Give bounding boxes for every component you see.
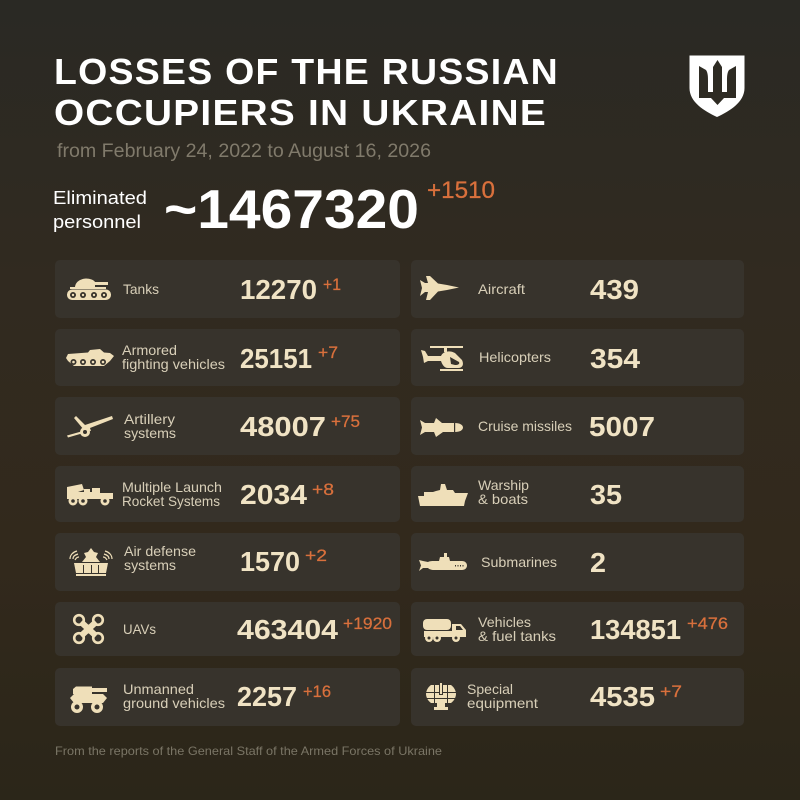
panel: cruise missiles bbox=[411, 397, 744, 455]
emblem: trident shield bbox=[690, 56, 744, 117]
icon: helicopter bbox=[421, 346, 463, 371]
value: aircraft: 439 bbox=[590, 274, 639, 305]
icon: submarine bbox=[419, 553, 467, 571]
delta: multiple launch rocket systems: +8 bbox=[312, 480, 334, 499]
label: cruise missiles: Cruise missiles bbox=[478, 418, 572, 434]
label: unmanned ground vehicles: Unmanned bbox=[123, 681, 194, 697]
label: submarines: Submarines bbox=[481, 554, 557, 570]
title: LOSSES OF THE RUSSIAN bbox=[54, 51, 559, 92]
delta: special equipment: +7 bbox=[660, 682, 682, 701]
value: armored fighting vehicles: 25151 bbox=[240, 343, 312, 374]
delta: air defense systems: +2 bbox=[305, 546, 327, 565]
panel: special equipment bbox=[411, 668, 744, 726]
value: artillery systems: 48007 bbox=[240, 411, 326, 442]
icon: warship bbox=[418, 484, 468, 506]
icon: armored vehicle bbox=[66, 349, 114, 366]
label: special equipment: Special bbox=[467, 681, 513, 697]
date range subtitle: from February 24, 2022 to August 16, 2026 bbox=[57, 141, 431, 162]
icon: rocket launcher bbox=[67, 484, 113, 506]
delta: artillery systems: +75 bbox=[331, 412, 360, 431]
icon: tank bbox=[67, 278, 111, 300]
label: multiple launch rocket systems: Multiple Launch bbox=[122, 479, 222, 495]
panel: multiple launch rocket systems bbox=[55, 466, 400, 522]
value: cruise missiles: 5007 bbox=[589, 411, 655, 442]
value: tanks: 12270 bbox=[240, 274, 317, 305]
icon: unmanned ground vehicle bbox=[70, 686, 107, 713]
source note: From the reports of the General Staff of the Armed Forces of Ukraine bbox=[55, 744, 442, 758]
value: air defense systems: 1570 bbox=[240, 546, 300, 577]
label: multiple launch rocket systems: Rocket Systems bbox=[122, 493, 220, 509]
label: warship and boats: & boats bbox=[478, 491, 528, 507]
label: air defense systems bbox=[124, 543, 196, 573]
icon: air defense bbox=[70, 548, 112, 576]
personnel label: personnel bbox=[53, 212, 141, 232]
icon: special equipment bbox=[426, 683, 456, 710]
label: multiple launch rocket systems bbox=[122, 479, 222, 509]
panel: helicopters bbox=[411, 329, 744, 386]
personnel daily change: +1510 bbox=[427, 177, 495, 204]
panel: tanks bbox=[55, 260, 400, 318]
label: artillery systems bbox=[124, 411, 176, 441]
label: air defense systems: systems bbox=[124, 557, 176, 573]
panel: vehicles and fuel tanks bbox=[411, 602, 744, 656]
label: helicopters: Helicopters bbox=[479, 349, 551, 365]
label: vehicles and fuel tanks: Vehicles bbox=[478, 614, 531, 630]
panel: armored fighting vehicles bbox=[55, 329, 400, 386]
icon: fuel truck bbox=[423, 619, 466, 642]
label: aircraft: Aircraft bbox=[478, 281, 525, 297]
panel: warship and boats bbox=[411, 466, 744, 522]
icon: cruise missile bbox=[420, 418, 463, 437]
title: OCCUPIERS IN UKRAINE bbox=[54, 92, 547, 133]
label: armored fighting vehicles: fighting vehicles bbox=[122, 356, 225, 372]
label: warship and boats bbox=[478, 477, 529, 507]
value: submarines: 2 bbox=[590, 547, 606, 578]
icon: drone bbox=[74, 615, 103, 643]
label: air defense systems: Air defense bbox=[124, 543, 196, 559]
delta: armored fighting vehicles: +7 bbox=[318, 343, 338, 362]
delta: UAVs: +1920 bbox=[343, 614, 392, 633]
label: armored fighting vehicles bbox=[122, 342, 225, 372]
value: special equipment: 4535 bbox=[590, 681, 655, 712]
label: unmanned ground vehicles: ground vehicles bbox=[123, 695, 225, 711]
value: warship and boats: 35 bbox=[590, 479, 622, 510]
personnel label: Eliminated bbox=[53, 188, 147, 208]
label: warship and boats: Warship bbox=[478, 477, 529, 493]
personnel count: ~1467320 bbox=[164, 178, 419, 240]
label: vehicles and fuel tanks bbox=[478, 614, 556, 644]
delta: tanks: +1 bbox=[323, 275, 341, 294]
panel: aircraft bbox=[411, 260, 744, 318]
value: vehicles and fuel tanks: 134851 bbox=[590, 614, 681, 645]
label: UAVs: UAVs bbox=[123, 621, 156, 637]
panel: submarines bbox=[411, 533, 744, 591]
label: special equipment: equipment bbox=[467, 695, 538, 711]
delta: unmanned ground vehicles: +16 bbox=[303, 682, 331, 701]
icon: aircraft bbox=[420, 276, 459, 300]
label: special equipment bbox=[467, 681, 538, 711]
label: unmanned ground vehicles bbox=[123, 681, 225, 711]
label: artillery systems: Artillery bbox=[124, 411, 175, 427]
panel: UAVs bbox=[55, 602, 400, 656]
value: multiple launch rocket systems: 2034 bbox=[240, 479, 307, 510]
label: armored fighting vehicles: Armored bbox=[122, 342, 177, 358]
title bbox=[54, 51, 559, 133]
personnel label bbox=[53, 188, 147, 232]
value: UAVs: 463404 bbox=[237, 614, 338, 645]
value: helicopters: 354 bbox=[590, 343, 640, 374]
panel: air defense systems bbox=[55, 533, 400, 591]
label: artillery systems: systems bbox=[124, 425, 176, 441]
icon: artillery gun bbox=[67, 416, 113, 438]
label: vehicles and fuel tanks: & fuel tanks bbox=[478, 628, 556, 644]
panel: unmanned ground vehicles bbox=[55, 668, 400, 726]
label: tanks: Tanks bbox=[123, 281, 159, 297]
delta: vehicles and fuel tanks: +476 bbox=[687, 614, 728, 633]
value: unmanned ground vehicles: 2257 bbox=[237, 681, 297, 712]
panel: artillery systems bbox=[55, 397, 400, 455]
